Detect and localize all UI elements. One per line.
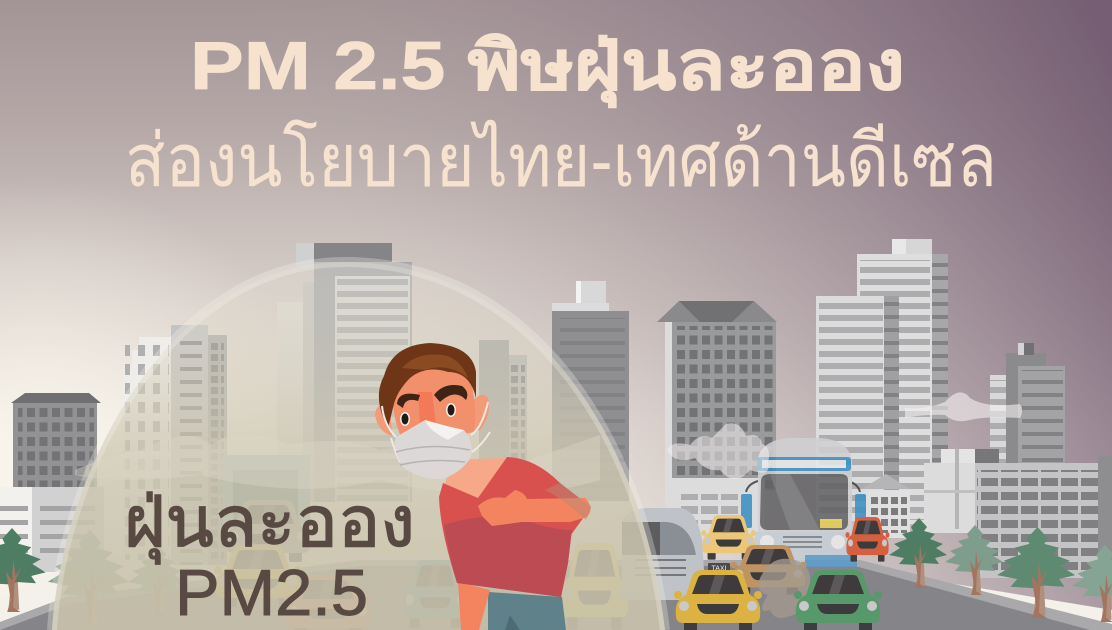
building: stepped white tower	[123, 325, 227, 565]
traffic: pale yellow car	[701, 515, 756, 560]
building: far left dark block	[11, 393, 101, 492]
tree left foreground	[0, 528, 46, 612]
yellow car inside dome	[214, 545, 302, 607]
left ear	[375, 404, 392, 436]
title line 1: PM 2.5 พิษฝุ่นละออง	[190, 28, 905, 108]
traffic: red car right	[846, 517, 890, 562]
exhaust plume left of bus	[667, 423, 769, 479]
pale yellow car at dome edge	[559, 543, 630, 630]
building: low white block mid	[665, 478, 765, 538]
building: small roofed house behind traffic	[862, 474, 910, 538]
sleeve cuff dome-tinted	[545, 483, 591, 520]
exhaust cloud between cars	[758, 559, 811, 618]
building: low white block left	[0, 487, 104, 572]
tree 3	[997, 527, 1075, 618]
shirt	[439, 457, 591, 597]
tree centre in dome	[128, 545, 186, 615]
blue car inside dome	[402, 560, 468, 628]
red car inside dome	[284, 575, 372, 630]
right ear	[470, 395, 489, 432]
title	[125, 28, 997, 202]
white van at dome edge	[622, 508, 706, 600]
teal truck	[222, 455, 310, 525]
green car	[794, 570, 882, 630]
city skyline buildings	[0, 239, 1112, 586]
tree 2	[945, 525, 1003, 595]
title line 2: ส่องนโยบายไทย-เทศด้านดีเซล	[125, 119, 997, 202]
tree left in dome	[48, 530, 129, 628]
label: PM2.5 dust	[124, 483, 415, 629]
trees right	[889, 518, 1112, 622]
eyes	[400, 403, 456, 426]
building: right dark tower	[990, 343, 1065, 470]
legs	[458, 582, 566, 630]
protective dome	[52, 262, 665, 630]
trees left	[0, 528, 186, 628]
label line 2: PM2.5	[175, 556, 368, 629]
bus	[741, 438, 866, 567]
mask straps	[382, 402, 490, 462]
building: centre tower with penthouse	[552, 281, 629, 501]
brows	[397, 385, 467, 408]
building: small tower behind man	[479, 340, 527, 495]
arm across chest	[478, 490, 591, 526]
building: right low block	[924, 449, 1112, 586]
hair	[379, 343, 476, 428]
smoke puffs	[667, 392, 1022, 618]
building: twin white towers	[816, 239, 948, 524]
taxi: TAXI	[711, 566, 727, 572]
dark car inside dome	[224, 500, 312, 562]
exhaust plume above right	[905, 392, 1022, 421]
building: big tower	[277, 243, 412, 502]
taxi	[674, 563, 762, 630]
cheek shading	[418, 392, 436, 425]
face mask	[395, 420, 472, 479]
neck and chest	[445, 458, 505, 500]
haze cloud inside dome	[75, 435, 600, 495]
man with face mask	[375, 343, 591, 630]
label line 1: ฝุ่นละออง	[124, 483, 415, 565]
tree 1	[889, 518, 947, 588]
traffic behind dome	[214, 455, 706, 630]
building: roofed grey tower	[657, 301, 777, 490]
tree 4	[1072, 545, 1112, 622]
traffic: brown car	[730, 545, 807, 595]
face	[392, 368, 475, 446]
ground: sidewalk and road	[0, 560, 1112, 630]
